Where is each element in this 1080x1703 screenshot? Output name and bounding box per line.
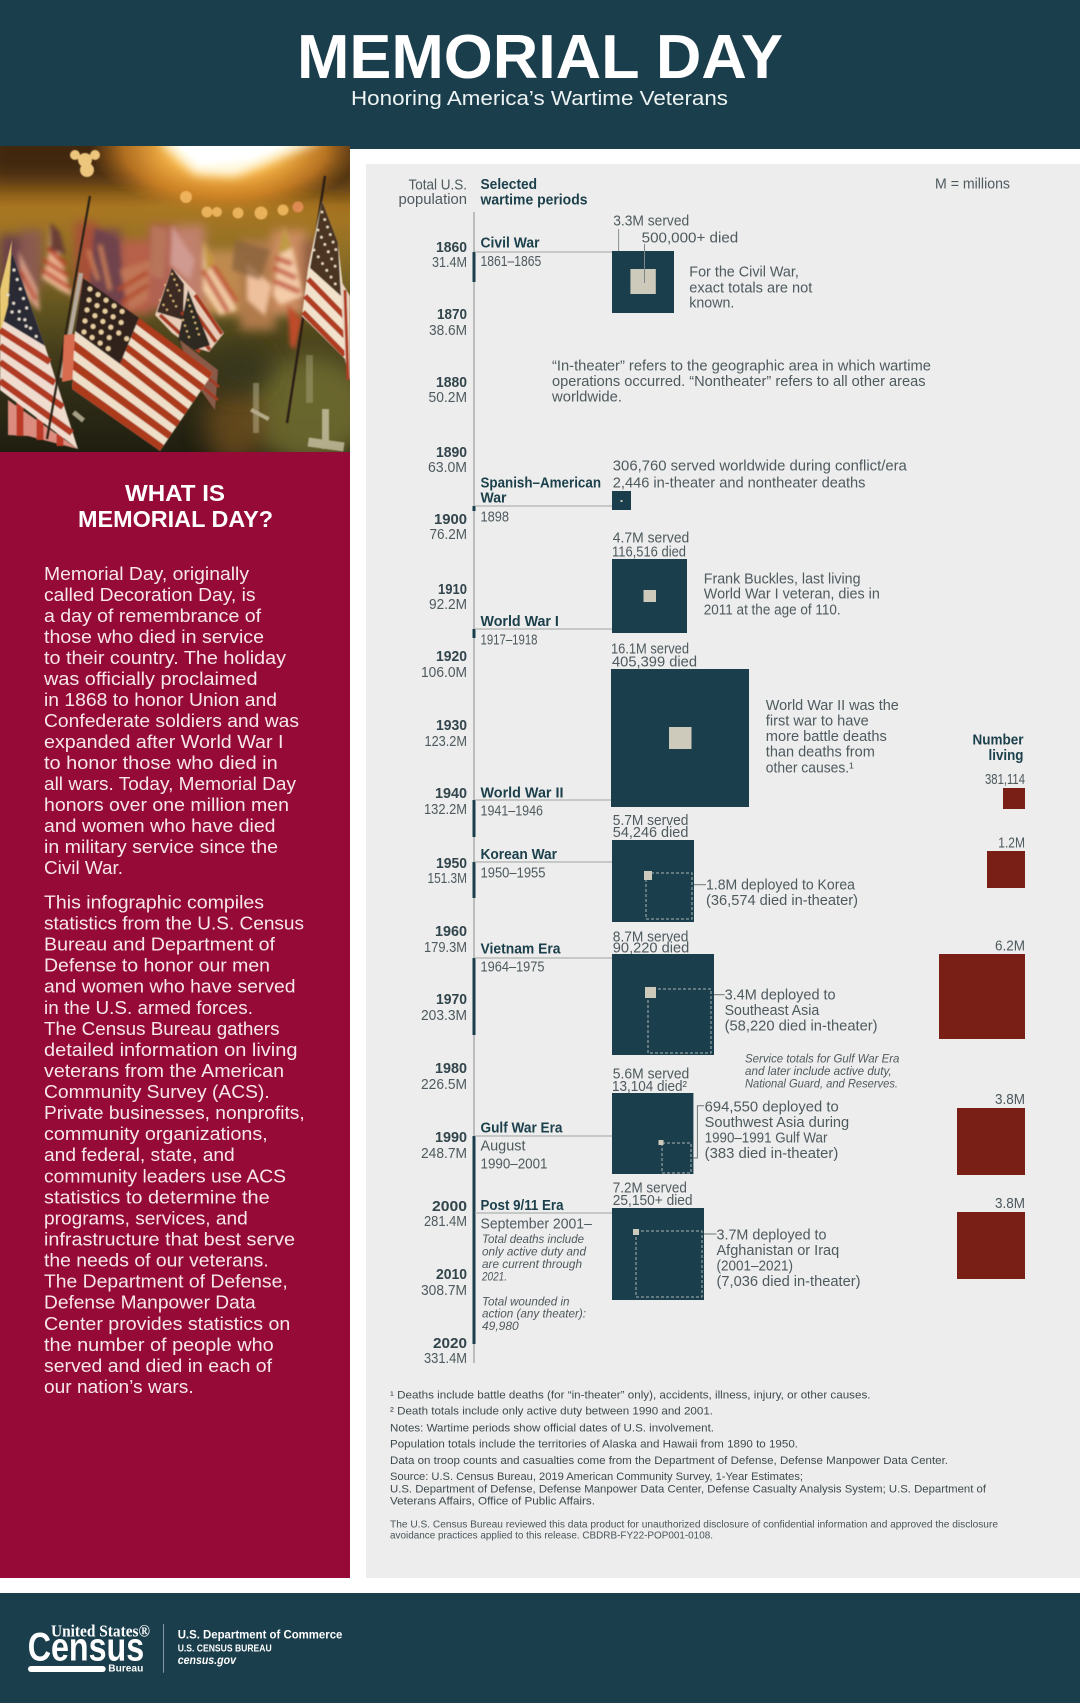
population by decade: 203.3M (421, 1008, 467, 1024)
war: Vietnam Era: 1964–1975 (480, 960, 544, 976)
war: Post 9/11 Era (475, 1181, 860, 1333)
crosses (72, 355, 345, 451)
note: service totals: National Guard, and Reserves. (745, 1077, 898, 1091)
population by decade: 1970 (436, 992, 467, 1008)
population by decade: 1910 (438, 582, 467, 598)
heading: number living: living (988, 748, 1024, 764)
war: Gulf War Era: Gulf War Era (480, 1120, 563, 1136)
war: Post 9/11 Era: Post 9/11 Era (480, 1198, 564, 1214)
second sharp flag (155, 268, 224, 410)
text block: second paragraph: Private businesses, nonprofits, (44, 1102, 305, 1123)
left flag (0, 240, 78, 449)
war: Post 9/11 Era: action (any theater): (482, 1307, 586, 1321)
footer text: department (178, 1628, 343, 1667)
far blurred flag row (0, 222, 327, 330)
footnotes and sources: ² Death totals include only active duty between 1990 and 2001. (390, 1406, 713, 1418)
population by decade: 92.2M (429, 597, 467, 613)
footer text: department: U.S. CENSUS BUREAU (178, 1643, 272, 1654)
war: World War I: World War I veteran, dies in (704, 587, 880, 603)
war: World War II: World War II was the (766, 698, 899, 714)
population by decade: 1860 (436, 240, 467, 256)
population by decade: 1900 (434, 512, 467, 528)
war: Gulf War Era: Southwest Asia during (705, 1115, 849, 1131)
note: service totals: Service totals for Gulf War Era (745, 1052, 899, 1066)
war: Post 9/11 Era: only active duty and (482, 1244, 587, 1258)
text block: first paragraph: honors over one million men (44, 794, 289, 815)
text block: second paragraph: infrastructure that best serve (44, 1228, 295, 1250)
footnotes and sources: Population totals include the territories of Alaska and Hawaii from 1890 to 1950. (390, 1439, 798, 1451)
population by decade: 1880 (436, 375, 467, 391)
population by decade: 1940 (435, 786, 467, 802)
text block: second paragraph: community organizations, (44, 1123, 268, 1144)
text block: first paragraph (43, 563, 299, 878)
text block: first paragraph: expanded after World War I (44, 731, 284, 752)
logo: United States Census Bureau: Bureau (108, 1663, 143, 1675)
war: World War I: Frank Buckles, last living (704, 571, 860, 587)
timeline axis (472, 212, 476, 1363)
war: Korean War: 54,246 died (613, 825, 688, 841)
note: in-theater definition: operations occurred. “Nontheater” refers to all other areas (552, 374, 926, 390)
chart: number living: 381,114 (985, 772, 1025, 788)
footnotes and sources: U.S. Department of Defense, Defense Manpower Data Center, Defense Casualty Analysis System; U.S. Department of (390, 1484, 986, 1496)
war: Vietnam Era: (58,220 died in-theater) (725, 1019, 878, 1035)
population by decade: 1960 (435, 924, 467, 940)
footnotes and sources: avoidance practices applied to this release. CBDRB-FY22-POP001-0108. (390, 1531, 713, 1542)
war: Spanish-American War: 2,446 in-theater and nontheater deaths (613, 475, 866, 491)
text block: first paragraph: in 1868 to honor Union and (44, 689, 277, 710)
war: Gulf War Era: 5.6M served (613, 1066, 689, 1082)
text block: first paragraph: Confederate soldiers and was (44, 710, 299, 731)
war: Vietnam Era: 90,220 died (613, 941, 689, 957)
text block: second paragraph: Center provides statistics on (44, 1313, 290, 1334)
war: Post 9/11 Era: 2021. (481, 1269, 507, 1283)
war: Civil War: known. (689, 296, 734, 312)
main flag (47, 196, 213, 451)
war: Korean War: (36,574 died in-theater) (706, 893, 858, 909)
war: World War II: other causes.¹ (766, 760, 854, 776)
chart: number living: 1.2M (998, 835, 1025, 851)
text block: first paragraph: all wars. Today, Memorial Day (44, 773, 297, 794)
text block: second paragraph: statistics to determine the (44, 1186, 270, 1207)
war: Post 9/11 Era: Afghanistan or Iraq (716, 1243, 839, 1259)
war: Gulf War Era (475, 1066, 849, 1174)
text block: first paragraph: to honor those who died in (44, 752, 278, 773)
text block: second paragraph: and federal, state, and (44, 1144, 235, 1165)
logo: United States Census Bureau: United States® (51, 1622, 150, 1641)
population by decade: 1990 (435, 1130, 467, 1146)
footnotes and sources: ¹ Deaths include battle deaths (for “in-theater” only), accidents, illness, injury, or other causes. (390, 1390, 870, 1402)
war: Gulf War Era: 694,550 deployed to (705, 1099, 839, 1115)
population by decade: 248.7M (421, 1146, 467, 1162)
text block: second paragraph: veterans from the American (44, 1060, 284, 1081)
footnotes and sources: Notes: Wartime periods show official dates of U.S. involvement. (390, 1422, 714, 1434)
war: World War I: 2011 at the age of 110. (704, 602, 841, 618)
text block: first paragraph: called Decoration Day, is (44, 584, 256, 605)
heading: what is memorial day (78, 480, 273, 532)
population by decade: 132.2M (424, 802, 467, 818)
war: Vietnam Era (475, 929, 878, 1055)
text block: second paragraph: Defense Manpower Data (44, 1292, 256, 1313)
war: Gulf War Era: 13,104 died² (612, 1079, 687, 1095)
war: Civil War: For the Civil War, (689, 265, 799, 281)
war: Vietnam Era: Vietnam Era (480, 942, 561, 958)
war: Korean War: 5.7M served (613, 813, 688, 829)
text block: first paragraph: a day of remembrance of (44, 605, 262, 626)
text block: first paragraph: and women who have died (44, 815, 276, 836)
panel: chart background (366, 164, 1080, 1578)
text block: first paragraph: in military service since the (44, 836, 278, 857)
war: Korean War: 1950–1955 (480, 865, 546, 881)
war: Civil War: 1861–1865 (480, 254, 541, 270)
column headers: population (398, 192, 467, 208)
footer text: department: U.S. Department of Commerce (178, 1628, 343, 1642)
war: Civil War: 500,000+ died (642, 231, 738, 247)
population by decade: 76.2M (430, 527, 467, 543)
population by decade: 106.0M (421, 665, 467, 681)
footnotes and sources: Veterans Affairs, Office of Public Affairs. (390, 1496, 595, 1508)
footnotes and sources: Data on troop counts and casualties come from the Department of Defense, Defense Manpower Data Center. (390, 1455, 948, 1467)
population by decade: 63.0M (428, 460, 467, 476)
population by decade: 50.2M (428, 390, 467, 406)
war: World War II: 16.1M served (611, 642, 689, 658)
column headers: Total U.S. (408, 177, 467, 193)
column headers: wartime periods (480, 192, 588, 208)
war: Vietnam Era: 3.4M deployed to (725, 988, 836, 1004)
war: World War I: 4.7M served (613, 531, 689, 547)
war: World War II (475, 642, 899, 820)
population by decade (421, 240, 467, 1367)
population by decade: 331.4M (424, 1351, 467, 1367)
text block: second paragraph: our nation’s wars. (44, 1376, 194, 1397)
war: Civil War: 3.3M served (613, 214, 689, 230)
war: World War I (475, 531, 880, 648)
war: Korean War: Korean War (480, 847, 557, 863)
war: Gulf War Era: (383 died in-theater) (705, 1146, 838, 1162)
population by decade: 226.5M (421, 1077, 467, 1093)
heading: what is memorial day: WHAT IS (125, 480, 225, 506)
war: Post 9/11 Era: Total wounded in (482, 1294, 570, 1308)
war: Spanish-American War: 1898 (480, 509, 509, 525)
war: Post 9/11 Era: 49,980 (482, 1319, 519, 1333)
war: Spanish-American War (475, 459, 907, 525)
column headers: Selected (480, 177, 537, 193)
war: Post 9/11 Era: 3.7M deployed to (716, 1227, 826, 1243)
text block: second paragraph: statistics from the U.S. Census (44, 912, 304, 934)
war: Civil War: Civil War (480, 235, 540, 251)
text block: second paragraph: programs, services, and (44, 1208, 248, 1228)
population by decade: 1980 (435, 1061, 467, 1077)
text block: second paragraph: served and died in each of (44, 1355, 273, 1376)
war: World War I: World War I (480, 614, 559, 630)
text block: second paragraph: The Census Bureau gathers (44, 1018, 280, 1039)
war: Post 9/11 Era: (7,036 died in-theater) (716, 1274, 860, 1290)
note: in-theater definition (551, 358, 931, 405)
text block: first paragraph: Memorial Day, originally (44, 563, 250, 584)
text block: second paragraph: The Department of Defense, (44, 1271, 288, 1292)
population by decade: 1870 (437, 307, 467, 323)
war: Post 9/11 Era: (2001–2021) (716, 1258, 793, 1274)
war: Post 9/11 Era: 7.2M served (613, 1181, 687, 1197)
text block: first paragraph: those who died in service (44, 626, 264, 647)
war: World War II: World War II (480, 786, 564, 802)
population by decade: 2000 (432, 1199, 467, 1215)
war: Gulf War Era: 1990–2001 (480, 1157, 548, 1173)
column headers (398, 177, 588, 208)
population by decade: 1890 (436, 445, 467, 461)
footnotes and sources: Source: U.S. Census Bureau, 2019 American Community Survey, 1-Year Estimates; (390, 1471, 803, 1483)
note: in-theater definition: worldwide. (551, 389, 622, 405)
war: Spanish-American War: Spanish–American (480, 475, 601, 491)
population by decade: 281.4M (424, 1214, 467, 1230)
chart: number living: 6.2M (995, 938, 1025, 954)
population by decade: 31.4M (432, 255, 467, 271)
footnotes and sources (390, 1390, 999, 1542)
chart: number living: 3.8M (995, 1196, 1025, 1212)
war: Spanish-American War: 306,760 served worldwide during conflict/era (613, 459, 907, 475)
war: Civil War: exact totals are not (689, 280, 812, 296)
legend note: M = millions: M = millions (935, 177, 1010, 193)
text block: first paragraph: to their country. The holiday (44, 647, 287, 668)
footer banner (0, 1593, 1080, 1703)
war: Post 9/11 Era: are current through (482, 1257, 582, 1271)
text block: second paragraph: the number of people who (44, 1334, 274, 1355)
chart: number living (939, 732, 1025, 1279)
war: Spanish-American War: War (480, 491, 507, 507)
war: Post 9/11 Era: 25,150+ died (613, 1193, 692, 1209)
right flag (287, 176, 350, 423)
bokeh lights (70, 150, 304, 220)
population by decade: 2020 (433, 1336, 467, 1352)
population by decade: 1950 (436, 856, 467, 872)
war: World War I: 116,516 died (612, 545, 686, 561)
population by decade: 179.3M (424, 940, 467, 956)
text block: second paragraph: This infographic compiles (44, 891, 264, 912)
war: World War II: 1941–1946 (480, 804, 543, 820)
logo: United States Census Bureau: Census (28, 1626, 144, 1670)
footnotes and sources: The U.S. Census Bureau reviewed this data product for unauthorized disclosure of confidential information and approved the disclosure (390, 1519, 999, 1530)
war: Post 9/11 Era: September 2001– (480, 1217, 592, 1233)
text block: second paragraph: Community Survey (ACS). (44, 1081, 270, 1102)
war: World War II: first war to have (766, 714, 869, 730)
war: World War II: more battle deaths (766, 729, 887, 745)
subtitle: Honoring America’s Wartime Veterans (351, 88, 728, 110)
war: Korean War: 1.8M deployed to Korea (706, 877, 855, 893)
heading: number living: Number (972, 732, 1024, 748)
note: service totals (745, 1052, 899, 1091)
war: Gulf War Era: 1990–1991 Gulf War (705, 1130, 828, 1146)
text block: first paragraph: was officially proclaimed (43, 668, 257, 689)
war: World War I: 1917–1918 (480, 632, 538, 648)
population by decade: 38.6M (429, 323, 467, 339)
header banner (0, 0, 1080, 149)
note: in-theater definition: “In-theater” refers to the geographic area in which wartime (552, 358, 931, 374)
war: Vietnam Era: 8.7M served (613, 929, 688, 945)
panel: What is Memorial Day (0, 452, 350, 1578)
war: Post 9/11 Era: Total deaths include (482, 1232, 584, 1246)
population by decade: 1920 (436, 649, 467, 665)
war: World War II: 405,399 died (612, 655, 697, 671)
population by decade: 308.7M (421, 1283, 467, 1299)
population by decade: 1930 (436, 718, 467, 734)
text block: first paragraph: Civil War. (44, 857, 123, 878)
text block: second paragraph (44, 891, 305, 1397)
title: MEMORIAL DAY (297, 23, 783, 92)
text block: second paragraph: in the U.S. armed forces. (44, 997, 253, 1018)
text block: second paragraph: detailed information on living (44, 1039, 298, 1060)
text block: second paragraph: Bureau and Department of (44, 934, 276, 954)
text block: second paragraph: and women who have served (44, 976, 296, 997)
heading: what is memorial day: MEMORIAL DAY? (78, 506, 273, 532)
text block: second paragraph: the needs of our veterans. (44, 1250, 269, 1271)
war: Civil War (475, 214, 812, 313)
photo: American flags at a cemetery at sunset (0, 146, 350, 452)
war: World War II: than deaths from (766, 745, 875, 761)
text block: second paragraph: community leaders use ACS (44, 1165, 286, 1186)
heading: number living (972, 732, 1024, 764)
population by decade: 2010 (436, 1267, 467, 1283)
war: Gulf War Era: August (480, 1139, 526, 1155)
war: Korean War (475, 813, 858, 922)
text block: second paragraph: Defense to honor our men (44, 955, 270, 976)
note: service totals: and later include active duty, (745, 1064, 892, 1078)
chart: number living: 3.8M (995, 1092, 1025, 1108)
population by decade: 151.3M (428, 871, 467, 887)
war: Vietnam Era: Southeast Asia (725, 1003, 819, 1019)
blurred midground flags (18, 222, 303, 350)
footer text: department: census.gov (178, 1655, 237, 1667)
population by decade: 123.2M (424, 734, 467, 750)
